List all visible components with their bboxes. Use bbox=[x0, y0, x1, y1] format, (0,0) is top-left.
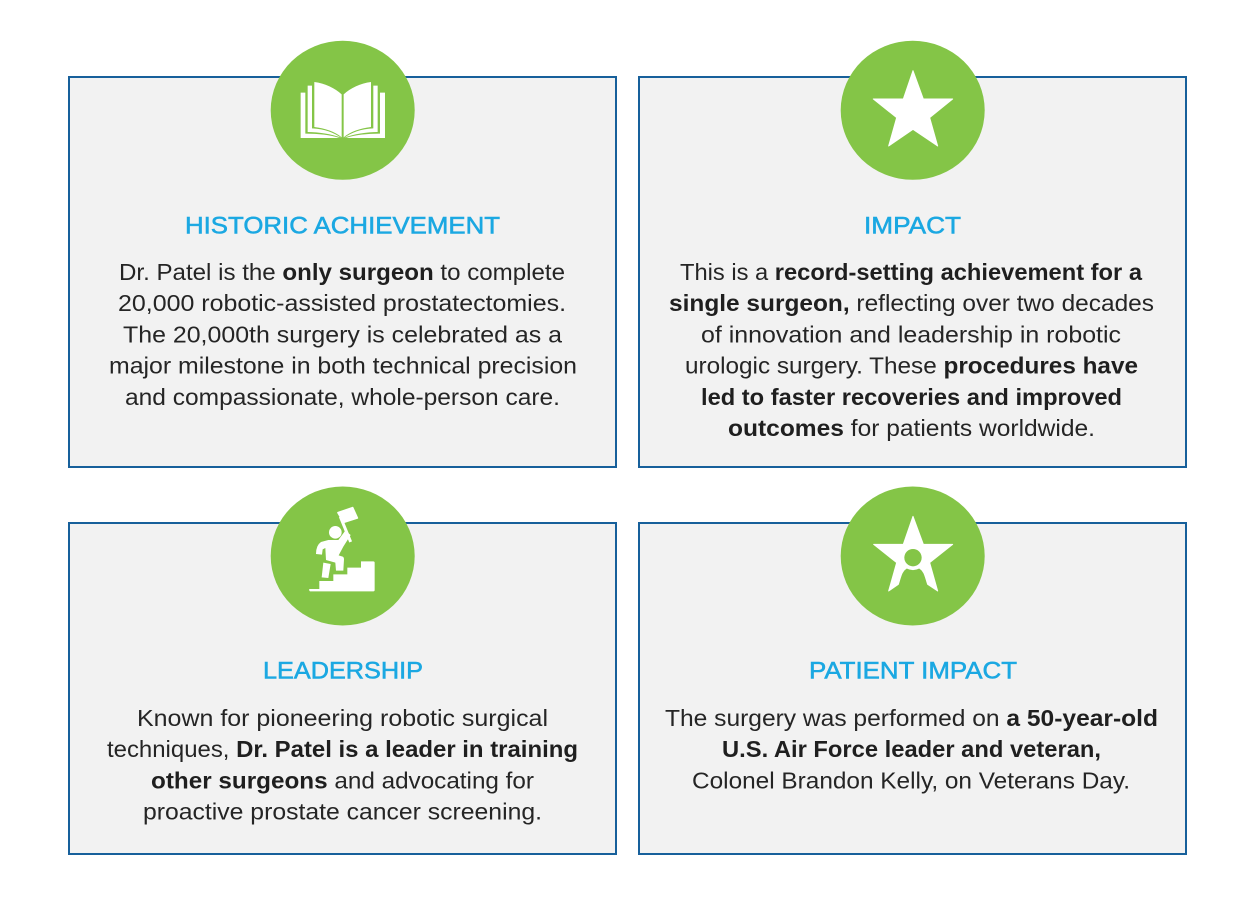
text: historic achievement body: major milestone in both technical precision bbox=[109, 353, 577, 379]
text: historic achievement body: The 20,000th surgery is celebrated as a bbox=[123, 321, 562, 347]
text: impact body: led to faster recoveries and improved bbox=[701, 384, 1122, 410]
heading: impact: IMPACT bbox=[864, 212, 961, 240]
text: leadership body: Known for pioneering robotic surgical bbox=[137, 705, 548, 731]
panel: leadership bbox=[69, 486, 616, 854]
panel: patient impact bbox=[639, 486, 1186, 854]
text: impact body: of innovation and leadership in robotic bbox=[701, 321, 1121, 347]
heading: patient impact: PATIENT IMPACT bbox=[809, 658, 1017, 684]
text: patient impact body: The surgery was performed on a 50-year-old bbox=[665, 705, 1158, 731]
heading: leadership: LEADERSHIP bbox=[263, 658, 423, 684]
text: historic achievement body bbox=[109, 259, 577, 410]
text: patient impact body: Colonel Brandon Kelly, on Veterans Day. bbox=[692, 767, 1130, 793]
panel: historic achievement bbox=[69, 41, 616, 467]
text: impact body: This is a record-setting achievement for a bbox=[680, 259, 1142, 285]
text: historic achievement body: Dr. Patel is the only surgeon to complete bbox=[119, 259, 565, 285]
panel: impact bbox=[639, 41, 1186, 467]
heading: historic achievement: HISTORIC ACHIEVEMENT bbox=[185, 212, 500, 240]
text: impact body: single surgeon, reflecting over two decades bbox=[669, 290, 1154, 316]
text: leadership body bbox=[107, 705, 578, 825]
icon: star with person bbox=[841, 486, 985, 626]
text: impact body bbox=[669, 259, 1154, 441]
text: patient impact body bbox=[665, 705, 1158, 793]
text: leadership body: other surgeons and advocating for bbox=[151, 767, 534, 793]
icon: person climbing stairs with flag bbox=[271, 486, 415, 626]
text: historic achievement body: 20,000 robotic-assisted prostatectomies. bbox=[118, 290, 566, 316]
text: leadership body: techniques, Dr. Patel is a leader in training bbox=[107, 736, 578, 762]
text: patient impact body: U.S. Air Force leader and veteran, bbox=[722, 736, 1101, 762]
text: impact body: outcomes for patients worldwide. bbox=[728, 415, 1095, 441]
text: historic achievement body: and compassionate, whole-person care. bbox=[125, 384, 560, 410]
text: impact body: urologic surgery. These procedures have bbox=[685, 353, 1138, 379]
icon: open book bbox=[271, 41, 415, 180]
icon: star bbox=[841, 41, 985, 180]
text: leadership body: proactive prostate cancer screening. bbox=[143, 799, 542, 825]
